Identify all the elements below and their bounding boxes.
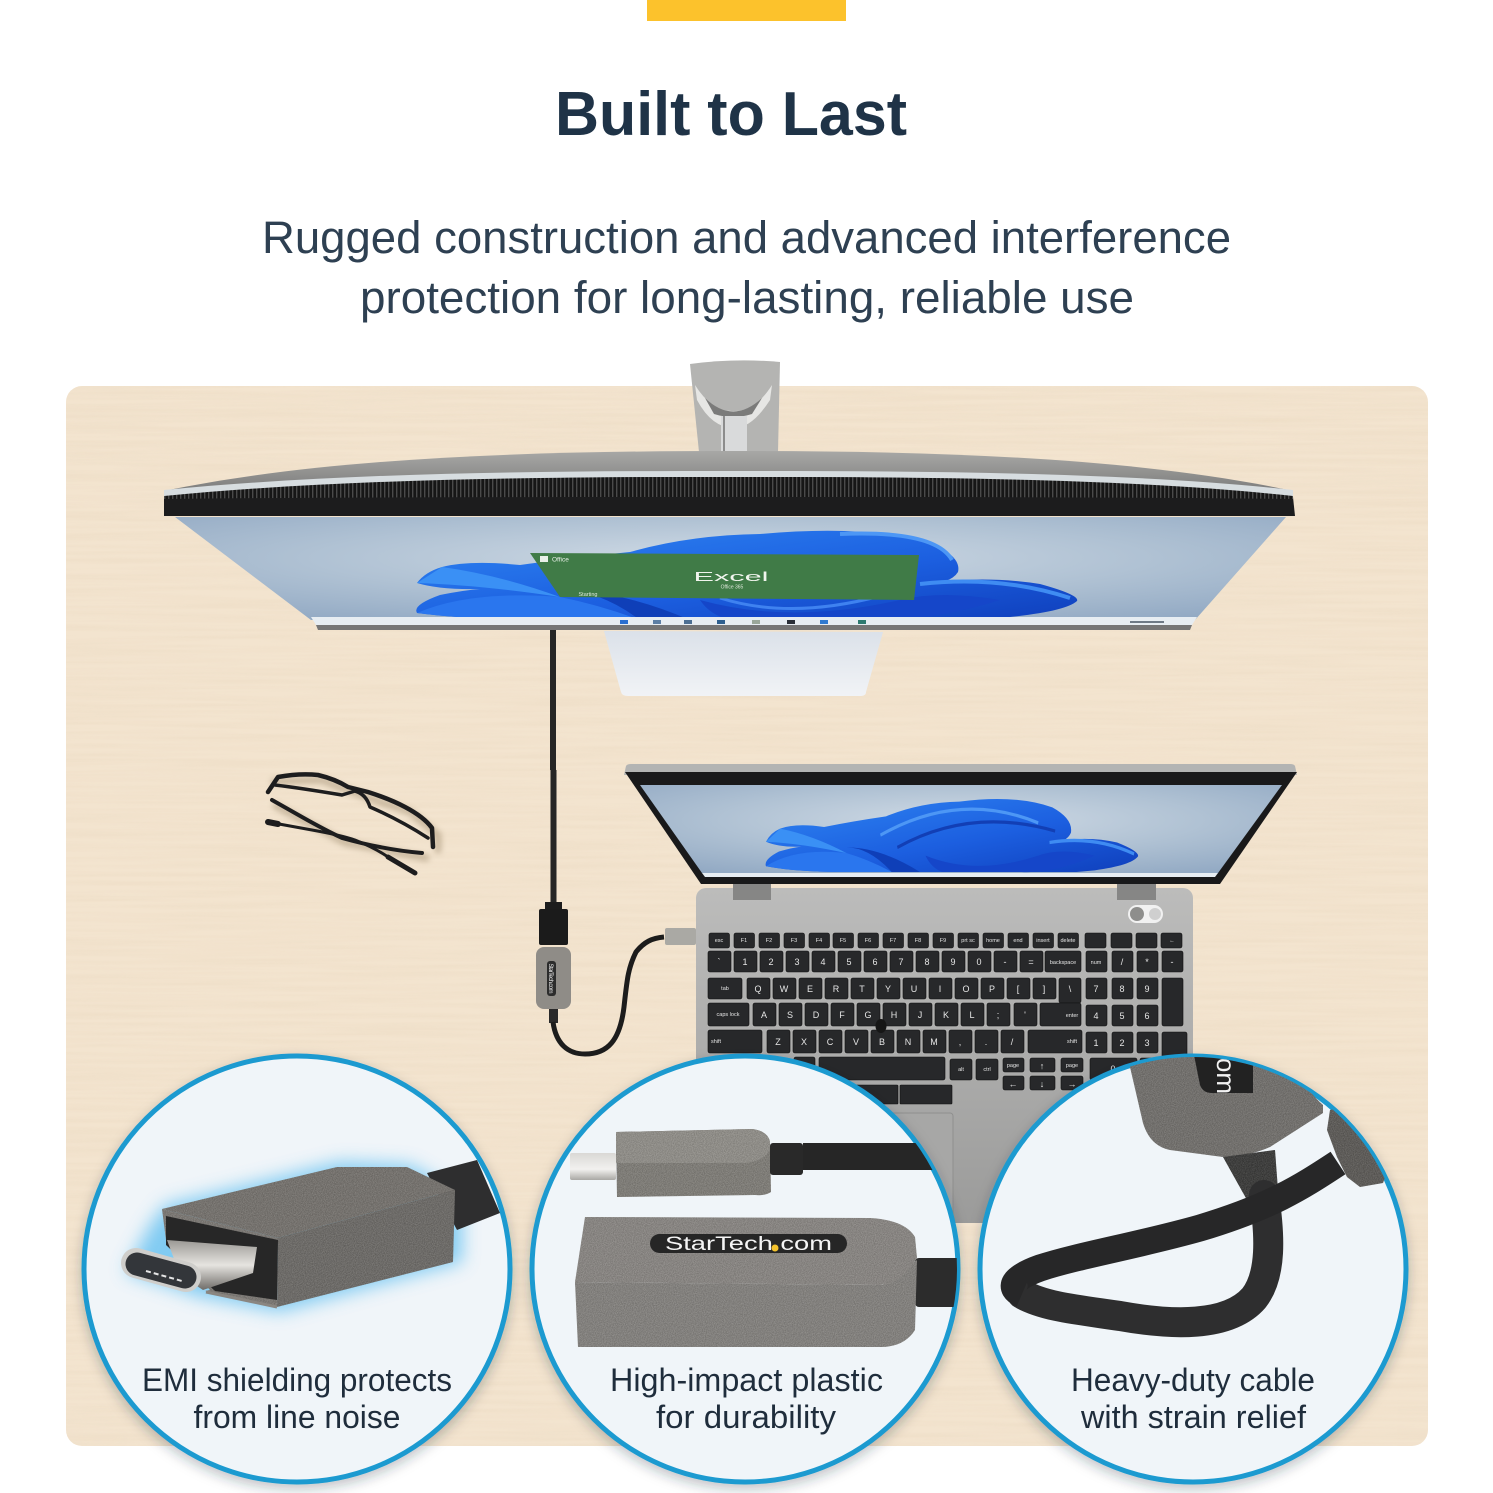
keyboard key legends: F2 [766, 938, 772, 944]
keyboard key legends: F [839, 1010, 845, 1020]
keyboard key legends: alt [958, 1067, 964, 1073]
left hinge [733, 884, 771, 900]
monitor foot [604, 631, 883, 696]
adapter logo [547, 961, 556, 996]
keyboard key legends: ' [1024, 1010, 1026, 1020]
excel splash window [530, 553, 919, 600]
glasses soft shadow [274, 780, 438, 858]
keyboard key legends: home [986, 938, 1000, 944]
monitor vented black band [164, 477, 1295, 516]
keyboard key legends: ← [1169, 938, 1175, 944]
keyboard key legends: 2 [768, 957, 774, 967]
strain relief [1223, 1150, 1278, 1200]
glasses lower rim [275, 785, 428, 838]
StarTech logo [650, 1234, 847, 1255]
keyboard key legends: L [969, 1010, 975, 1020]
fingerprint reader [1128, 905, 1163, 923]
upper usb-c connector [570, 1129, 938, 1197]
keyboard key legends: esc [715, 938, 724, 944]
cable upper strand [1014, 1163, 1338, 1294]
trackpad [800, 1113, 953, 1233]
keyboard key legends: G [864, 1010, 872, 1020]
keyboard key legends: ` [718, 957, 720, 967]
adapter tail [549, 1009, 558, 1023]
keyboard key legends: prt sc [961, 938, 975, 944]
caption [142, 1362, 452, 1435]
keyboard key legends: F1 [741, 938, 747, 944]
keyboard key legends: 5 [1119, 1011, 1125, 1021]
usb-c to hdmi adapter [536, 902, 696, 1054]
monitor cable [550, 630, 556, 904]
keyboard key legends: delete [1060, 938, 1076, 944]
keyboard key legends: T [859, 984, 865, 994]
keyboard key legends: F6 [865, 938, 871, 944]
monitor silver edge [164, 471, 1293, 497]
keyboard key legends: K [943, 1010, 949, 1020]
second adapter body cropped [1327, 1109, 1384, 1187]
keyboard key legends: 4 [1093, 1011, 1099, 1021]
monitor back shell [164, 451, 1293, 491]
keyboard key legends: 7 [1093, 984, 1099, 994]
keyboard key legends: Z [775, 1037, 781, 1047]
laptop display [640, 785, 1282, 877]
keyboard key legends: , [959, 1037, 961, 1047]
keyboard key legends: shift [711, 1039, 722, 1045]
keyboard key legends: 6 [872, 957, 878, 967]
keyboard key legends: F5 [840, 938, 846, 944]
keyboard key legends: end [1013, 938, 1023, 944]
keyboard key legends: W [780, 984, 789, 994]
keyboard key legends: N [905, 1037, 911, 1047]
excel splash window: Office 365 [721, 584, 744, 590]
caption: for durability [656, 1399, 836, 1435]
monitor lower bezel [316, 625, 1192, 630]
keyboard key legends: D [813, 1010, 820, 1020]
monitor stand arm [690, 360, 780, 452]
keyboard key legends: ] [1043, 984, 1045, 994]
hdmi plug collar [545, 902, 562, 910]
keyboard key legends: ↓ [1040, 1079, 1044, 1089]
keyboard key legends: 3 [794, 957, 800, 967]
callout: high-impact plastic [532, 1056, 960, 1482]
keyboard key legends: . [985, 1037, 987, 1047]
keyboard key legends: 0 [976, 957, 982, 967]
keyboard key legends: E [807, 984, 813, 994]
lower adapter with logo [575, 1217, 960, 1347]
pointing stick [876, 1019, 886, 1033]
keyboard key legends: V [853, 1037, 859, 1047]
keyboard key legends: - [1170, 957, 1174, 967]
keyboard key legends: ↑ [1040, 1061, 1044, 1071]
keyboard key legends: / [1011, 1037, 1014, 1047]
keyboard key legends: I [939, 984, 941, 994]
laptop [624, 764, 1297, 1233]
cable end [427, 1160, 500, 1230]
keyboard key legends: caps lock [717, 1012, 740, 1018]
adapter body [536, 947, 571, 1009]
keyboard key legends: Y [885, 984, 891, 994]
keyboard key legends: S [787, 1010, 793, 1020]
keyboard key legends: 2 [1119, 1038, 1125, 1048]
excel splash window: Excel [694, 569, 769, 584]
keyboard key legends: page [1007, 1063, 1019, 1069]
laptop lid [624, 764, 1297, 775]
keyboard key legends: - [1004, 957, 1006, 967]
glasses temples [268, 800, 422, 873]
laptop base [696, 888, 1193, 1223]
hdmi male connector [539, 909, 568, 945]
keyboard key legends: insert [1036, 938, 1050, 944]
keyboard key legends: J [918, 1010, 922, 1020]
keyboard key legends: 9 [1144, 984, 1150, 994]
keyboard key legends: 5 [846, 957, 852, 967]
keyboard key legends: B [879, 1037, 885, 1047]
keyboard key legends: C [827, 1037, 834, 1047]
keyboard key legends: F8 [915, 938, 921, 944]
callout: EMI shielding [84, 1056, 510, 1482]
keyboard key legends: M [930, 1037, 938, 1047]
keyboard key legends: 1 [1093, 1038, 1099, 1048]
keyboard key legends: F9 [940, 938, 946, 944]
keyboard key legends: / [1121, 957, 1124, 967]
excel splash window: Office [552, 556, 569, 564]
keyboard key legends: A [761, 1010, 767, 1020]
cable lower strand [1022, 1195, 1268, 1322]
laptop bloom wallpaper [766, 799, 1138, 872]
short usb-c cable [553, 937, 664, 1054]
caption [610, 1362, 883, 1435]
keyboard key legends: ctrl [983, 1067, 991, 1073]
caption: EMI shielding protects [142, 1362, 452, 1398]
keyboard key legends: F4 [816, 938, 822, 944]
excel splash window: Starting [579, 592, 597, 598]
keyboard key legends [711, 938, 1175, 1089]
keyboard key legends: 0 [1110, 1064, 1116, 1074]
keyboard key legends: ← [1008, 1079, 1018, 1089]
keyboard key legends: 3 [1144, 1038, 1150, 1048]
usb-c plug tip [136, 1263, 186, 1281]
caption: with strain relief [1080, 1399, 1306, 1435]
keyboard key legends: P [989, 984, 995, 994]
keyboard key legends: shift [1067, 1039, 1078, 1045]
keyboard key legends: num [1091, 960, 1102, 966]
keyboard key legends: [ [1017, 984, 1020, 994]
keyboard key legends: → [1068, 1079, 1076, 1089]
caption [1071, 1362, 1315, 1435]
usb-c metal shell [162, 1167, 455, 1307]
keyboard key legends: 1 [742, 957, 748, 967]
glasses frame rim [268, 774, 433, 847]
yellow accent bar [647, 0, 846, 21]
keyboard key legends: 8 [924, 957, 930, 967]
blue EMI glow [125, 1162, 462, 1312]
keyboard key legends: O [962, 984, 970, 994]
monitor [164, 360, 1295, 696]
glasses [268, 774, 438, 873]
keyboard key legends: H [891, 1010, 897, 1020]
monitor display [175, 517, 1286, 625]
keyboard key legends: enter [1066, 1013, 1078, 1019]
keyboard key legends: 7 [898, 957, 904, 967]
subtitle [262, 212, 1231, 323]
caption: from line noise [194, 1399, 400, 1435]
keyboard key legends: = [1028, 957, 1034, 967]
keyboard keys [708, 933, 1187, 1104]
keyboard key legends: X [801, 1037, 807, 1047]
keyboard key legends: F3 [791, 938, 797, 944]
taskbar [311, 617, 1197, 625]
keyboard key legends: * [1145, 957, 1149, 967]
keyboard key legends: 9 [950, 957, 956, 967]
keyboard key legends: \ [1069, 984, 1072, 994]
keyboard key legends: tab [721, 986, 729, 992]
windows bloom wallpaper [416, 531, 1077, 620]
right hinge [1117, 884, 1156, 900]
keyboard key legends: ; [997, 1010, 999, 1020]
keyboard key legends: F7 [890, 938, 896, 944]
StarTech logo: StarTech.com [665, 1234, 832, 1255]
keyboard key legends: 6 [1144, 1011, 1150, 1021]
callout: heavy-duty cable [980, 1038, 1406, 1482]
laptop screen bezel [625, 772, 1297, 884]
subtitle: Rugged construction and advanced interference [262, 212, 1231, 263]
subtitle: protection for long-lasting, reliable use [360, 272, 1134, 323]
caption: High-impact plastic [610, 1362, 883, 1398]
adapter body cropped: .com [1211, 1038, 1241, 1094]
keyboard key legends: R [833, 984, 840, 994]
keyboard key legends: 8 [1119, 984, 1125, 994]
keyboard key legends: U [911, 984, 917, 994]
title: Built to Last [555, 80, 907, 149]
usb-c plug into laptop [665, 928, 696, 945]
keyboard key legends: page [1066, 1063, 1078, 1069]
keyboard key legends: Q [754, 984, 762, 994]
adapter body cropped [1130, 1057, 1323, 1157]
panel: wood desk background [66, 386, 1428, 1446]
caption: Heavy-duty cable [1071, 1362, 1315, 1398]
keyboard key legends: 4 [820, 957, 826, 967]
keyboard key legends: backspace [1050, 960, 1076, 966]
adapter logo: StarTech.com [547, 964, 553, 994]
